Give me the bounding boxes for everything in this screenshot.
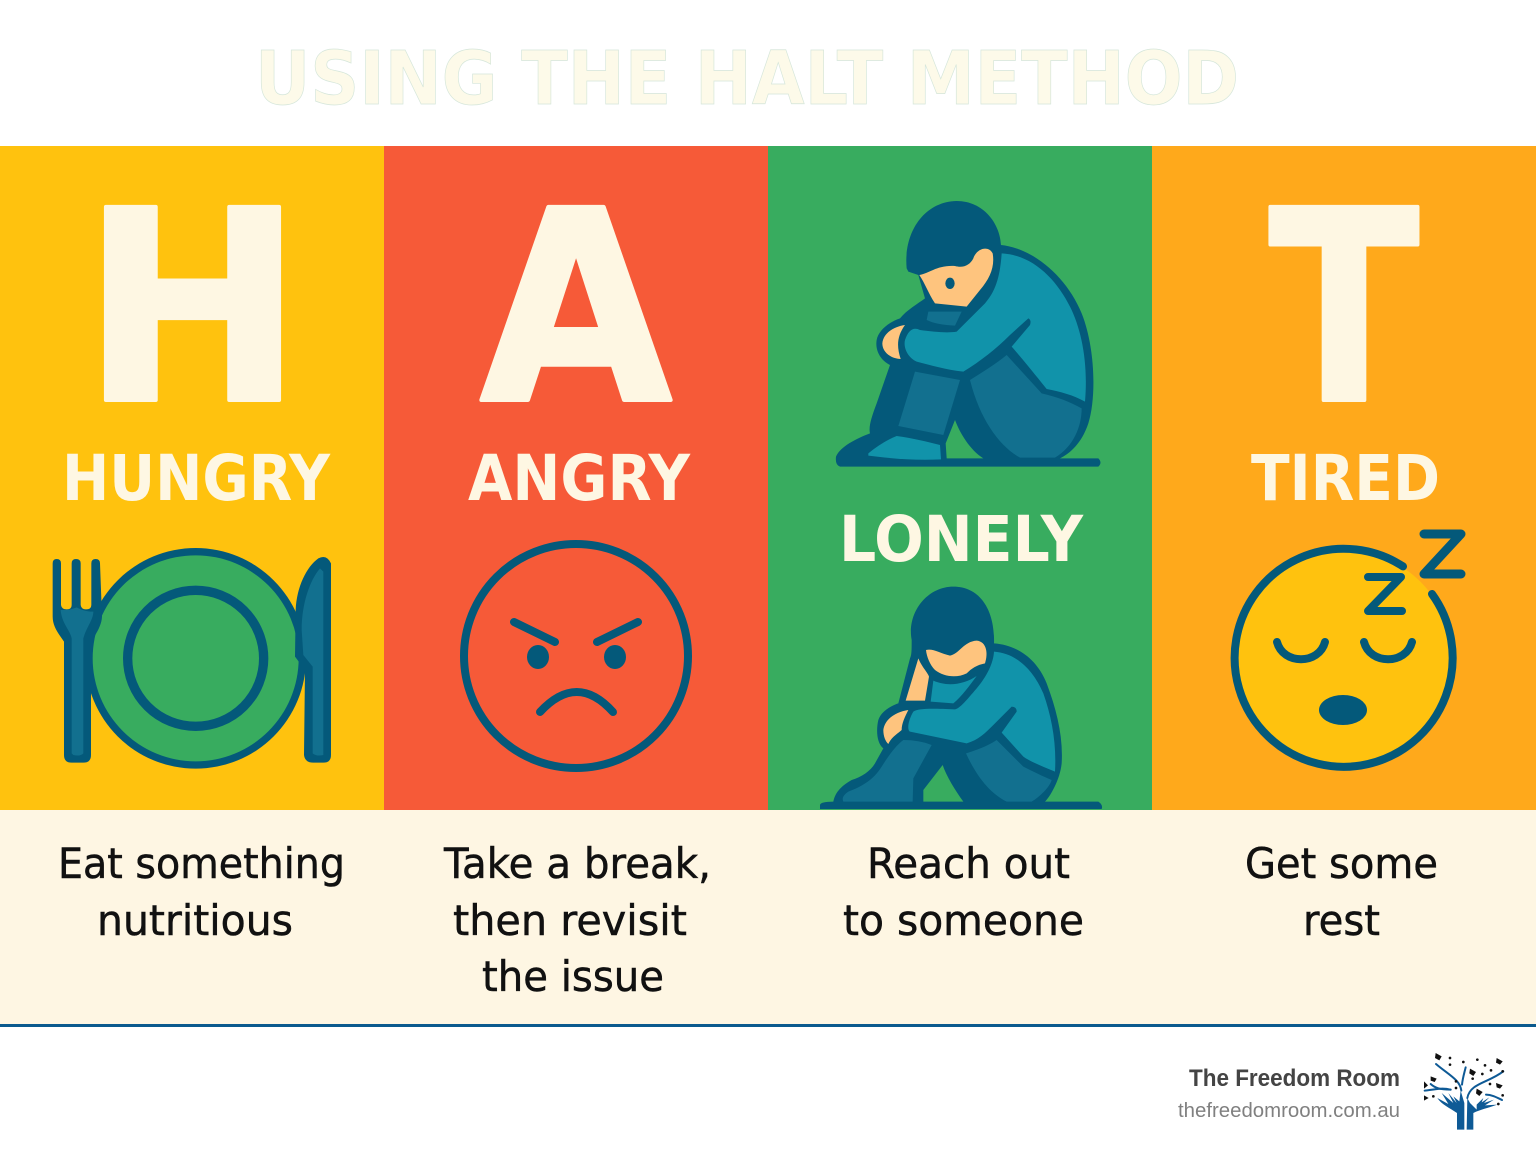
action: tired — [1245, 839, 1438, 945]
brand text — [1178, 1065, 1400, 1122]
action: lonely: Reach out — [867, 839, 1070, 888]
title: USING THE HALT METHOD — [255, 36, 1239, 122]
action: lonely — [843, 839, 1084, 945]
letter T: T — [1269, 155, 1420, 463]
icon: seated figure, hand on head — [820, 587, 1102, 809]
panel: lonely — [768, 146, 1152, 810]
action: tired: Get some — [1245, 839, 1438, 888]
icon: angry face — [464, 544, 688, 768]
action: angry: Take a break, — [443, 839, 711, 888]
action: hungry: nutritious — [97, 896, 293, 945]
icon: sleeping face — [1235, 534, 1461, 767]
panel: hungry — [0, 146, 384, 810]
panel: angry — [384, 146, 768, 810]
action: tired: rest — [1303, 896, 1380, 945]
letter H: H — [82, 155, 303, 463]
brand text: The Freedom Room — [1189, 1065, 1400, 1092]
action: lonely: to someone — [843, 896, 1084, 945]
icon: seated figure, head on knees — [836, 201, 1100, 467]
action: hungry: Eat something — [58, 839, 345, 888]
label: hungry: HUNGRY — [62, 442, 331, 515]
icon: logo tree with hands — [1424, 1053, 1504, 1130]
label: angry: ANGRY — [468, 442, 691, 515]
action: angry: then revisit — [453, 896, 687, 945]
action: angry: the issue — [482, 952, 664, 1001]
icon: plate and cutlery — [53, 548, 331, 769]
action: hungry — [58, 839, 345, 945]
label: lonely: LONELY — [839, 503, 1084, 576]
brand text: thefreedomroom.com.au — [1178, 1100, 1400, 1122]
panel: tired — [1152, 146, 1536, 810]
panel: actions strip — [0, 810, 1536, 1024]
label: tired: TIRED — [1251, 442, 1440, 515]
action: angry — [443, 839, 711, 1001]
letter A: A — [480, 155, 674, 463]
